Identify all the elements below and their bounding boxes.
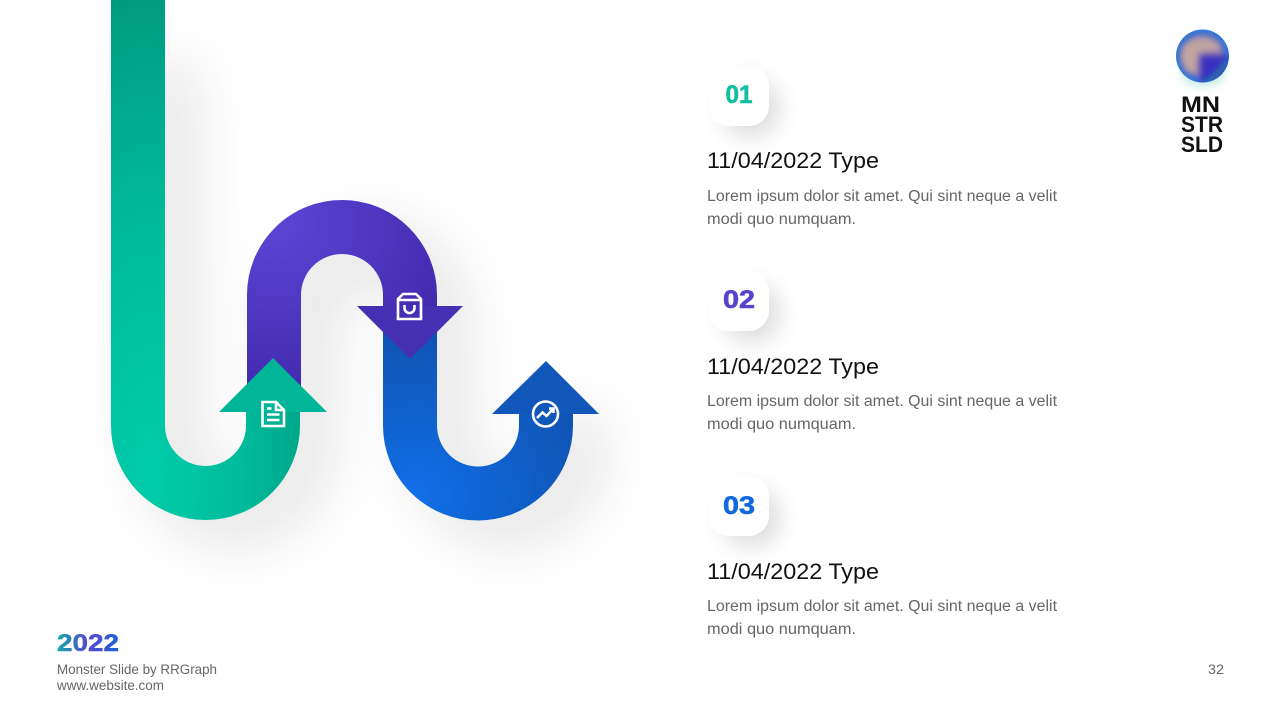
body 01 [707, 188, 1058, 228]
page number: 32 [1208, 661, 1224, 677]
soft drop shadows [168, 64, 576, 518]
green arrow [138, 0, 327, 493]
arrow diagram [138, 0, 599, 518]
logo orb [1176, 30, 1229, 86]
footer credits [56, 662, 217, 693]
heading 02: 11/04/2022 Type [707, 354, 879, 379]
number badge 01: 01 [726, 81, 753, 109]
item 01 [707, 66, 1058, 228]
body 03 [707, 598, 1058, 638]
blue arrow [410, 325, 599, 494]
body 03: Lorem ipsum dolor sit amet. Qui sint neque a velit [707, 598, 1058, 615]
body 01: Lorem ipsum dolor sit amet. Qui sint neque a velit [707, 188, 1058, 205]
footer year: 2022 [57, 630, 119, 657]
logo wordmark: MN [1181, 92, 1220, 117]
item 03 [707, 476, 1058, 638]
purple arrow [274, 227, 410, 395]
logo [1176, 30, 1229, 157]
number badge 01 [709, 66, 777, 134]
item 02 [707, 271, 1058, 433]
heading 01: 11/04/2022 Type [707, 148, 879, 173]
body 02 [707, 393, 1058, 433]
icon: shopping bag [398, 294, 421, 319]
icon: trend chart [533, 402, 558, 426]
body 02: modi quo numquam. [707, 416, 856, 433]
body 03: modi quo numquam. [707, 621, 856, 638]
number badge 02: 02 [723, 286, 755, 314]
number badge 03: 03 [723, 492, 755, 520]
logo wordmark: STR [1181, 112, 1223, 137]
number badge 02 [709, 271, 777, 339]
body 02: Lorem ipsum dolor sit amet. Qui sint neque a velit [707, 393, 1058, 410]
footer credits: www.website.com [56, 678, 164, 693]
logo wordmark [1181, 92, 1223, 157]
icon: document [262, 402, 284, 426]
number badge 03 [709, 476, 777, 544]
purple arrow head [357, 306, 463, 359]
body 01: modi quo numquam. [707, 211, 856, 228]
heading 03: 11/04/2022 Type [707, 559, 879, 584]
logo wordmark: SLD [1181, 132, 1223, 157]
footer credits: Monster Slide by RRGraph [57, 662, 217, 677]
